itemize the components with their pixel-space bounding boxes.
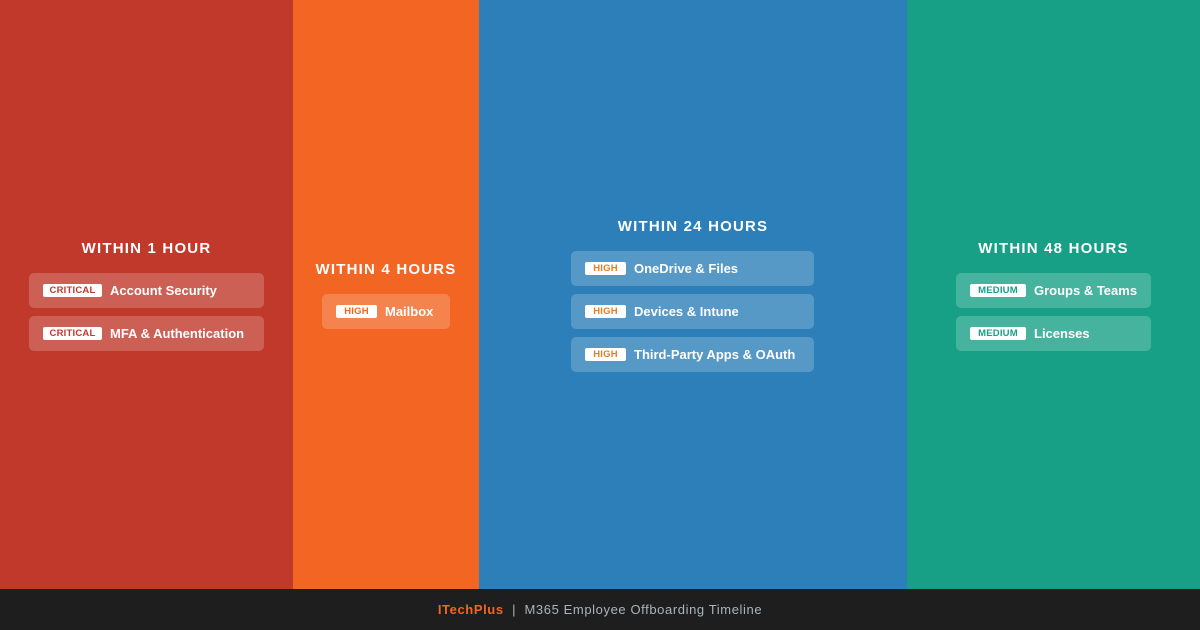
item: mailbox: Mailbox: [385, 304, 433, 319]
heading: within 4 hours: WITHIN 4 HOURS: [316, 261, 456, 278]
item: onedrive: HIGH: [593, 263, 618, 274]
item: groups: MEDIUM: [978, 285, 1018, 296]
panel: within 24 hours: [479, 0, 907, 589]
item: onedrive: OneDrive & Files: [634, 261, 738, 276]
item: MFA: MFA & Authentication: [110, 326, 244, 341]
heading: within 1 hour: WITHIN 1 HOUR: [82, 240, 211, 257]
item: mailbox: [322, 294, 450, 329]
panel: within 48 hours: [907, 0, 1200, 589]
item: MFA: CRITICAL: [50, 328, 95, 339]
item: MFA: [29, 316, 264, 351]
item: third-party apps: Third-Party Apps & OAuth: [634, 347, 795, 362]
item: mailbox: HIGH: [344, 306, 369, 317]
panel: within 1 hour: [0, 0, 293, 589]
item: account security: CRITICAL: [50, 285, 95, 296]
item: licenses: MEDIUM: [978, 328, 1018, 339]
item: groups: [956, 273, 1151, 308]
item: devices: [571, 294, 814, 329]
item: licenses: [956, 316, 1151, 351]
heading: within 48 hours: WITHIN 48 HOURS: [978, 240, 1129, 257]
item: devices: Devices & Intune: [634, 304, 739, 319]
panel: within 4 hours: [293, 0, 479, 589]
item: licenses: Licenses: [1034, 326, 1090, 341]
item: devices: HIGH: [593, 306, 618, 317]
item: onedrive: [571, 251, 814, 286]
heading: within 24 hours: WITHIN 24 HOURS: [618, 218, 768, 235]
item: groups: Groups & Teams: [1034, 283, 1137, 298]
item: third-party apps: HIGH: [593, 349, 618, 360]
item: third-party apps: [571, 337, 814, 372]
item: account security: Account Security: [110, 283, 217, 298]
footer: ITechPlus | M365 Employee Offboarding Timeline: [438, 602, 762, 617]
item: account security: [29, 273, 264, 308]
footer: [0, 589, 1200, 630]
